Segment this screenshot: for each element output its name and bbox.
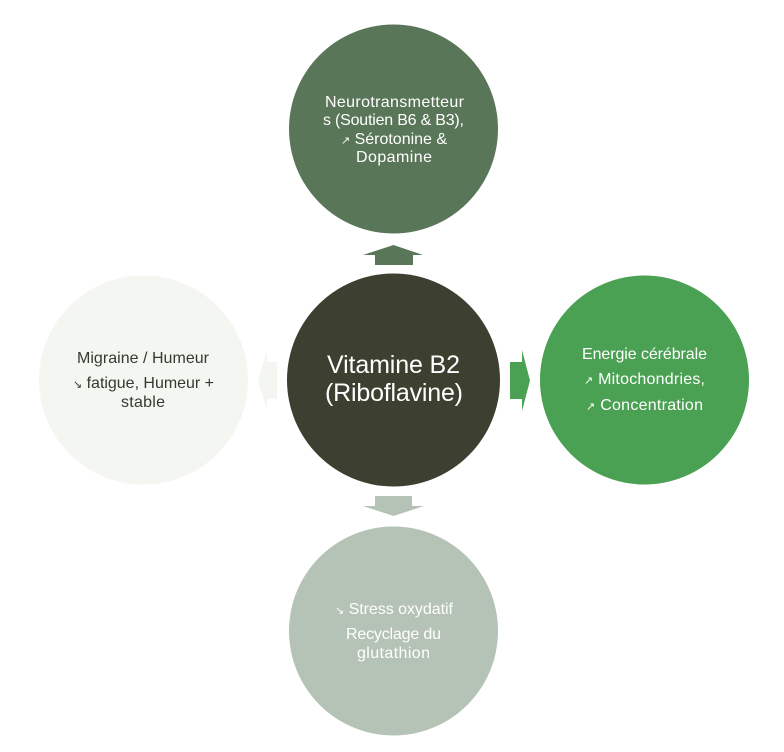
text: brain energy: Energie cérébrale (582, 346, 707, 363)
panel: neurotransmitters circle (289, 24, 498, 234)
panel: central circle (287, 274, 500, 486)
text: Vitamine B2 (325, 351, 463, 407)
text: neurotransmitters: ↗ Sérotonine & (341, 131, 447, 148)
text: neurotransmitters: Neurotransmetteur (325, 94, 465, 111)
arrow: down to oxidative stress (363, 496, 424, 516)
panel: oxidative stress circle (289, 526, 498, 736)
text: migraine and mood: stable (121, 394, 165, 411)
panel: brain energy circle (540, 276, 749, 484)
text: neurotransmitters: s (Soutien B6 & B3), (323, 112, 464, 129)
arrow: up to neurotransmitters (363, 245, 423, 265)
text: oxidative stress (335, 601, 454, 662)
arrow: left to migraine (258, 351, 277, 410)
arrow: right to brain energy (510, 350, 530, 411)
text: oxidative stress: ↘ Stress oxydatif (335, 601, 454, 618)
text: oxidative stress: Recyclage du (346, 626, 441, 643)
text: neurotransmitters: Dopamine (356, 149, 432, 166)
text: brain energy (582, 346, 707, 414)
text: oxidative stress: glutathion (357, 645, 430, 662)
text: brain energy: ↗ Concentration (586, 397, 703, 414)
text: brain energy: ↗ Mitochondries, (584, 371, 705, 388)
text: Vitamine B2: Vitamine B2 (327, 351, 460, 379)
text: neurotransmitters (323, 94, 465, 166)
text: Vitamine B2: (Riboflavine) (325, 379, 463, 407)
text: migraine and mood: ↘ fatigue, Humeur + (73, 375, 214, 392)
panel: migraine circle (39, 276, 248, 484)
text: migraine and mood: Migraine / Humeur (77, 350, 210, 367)
text: migraine and mood (73, 350, 214, 411)
